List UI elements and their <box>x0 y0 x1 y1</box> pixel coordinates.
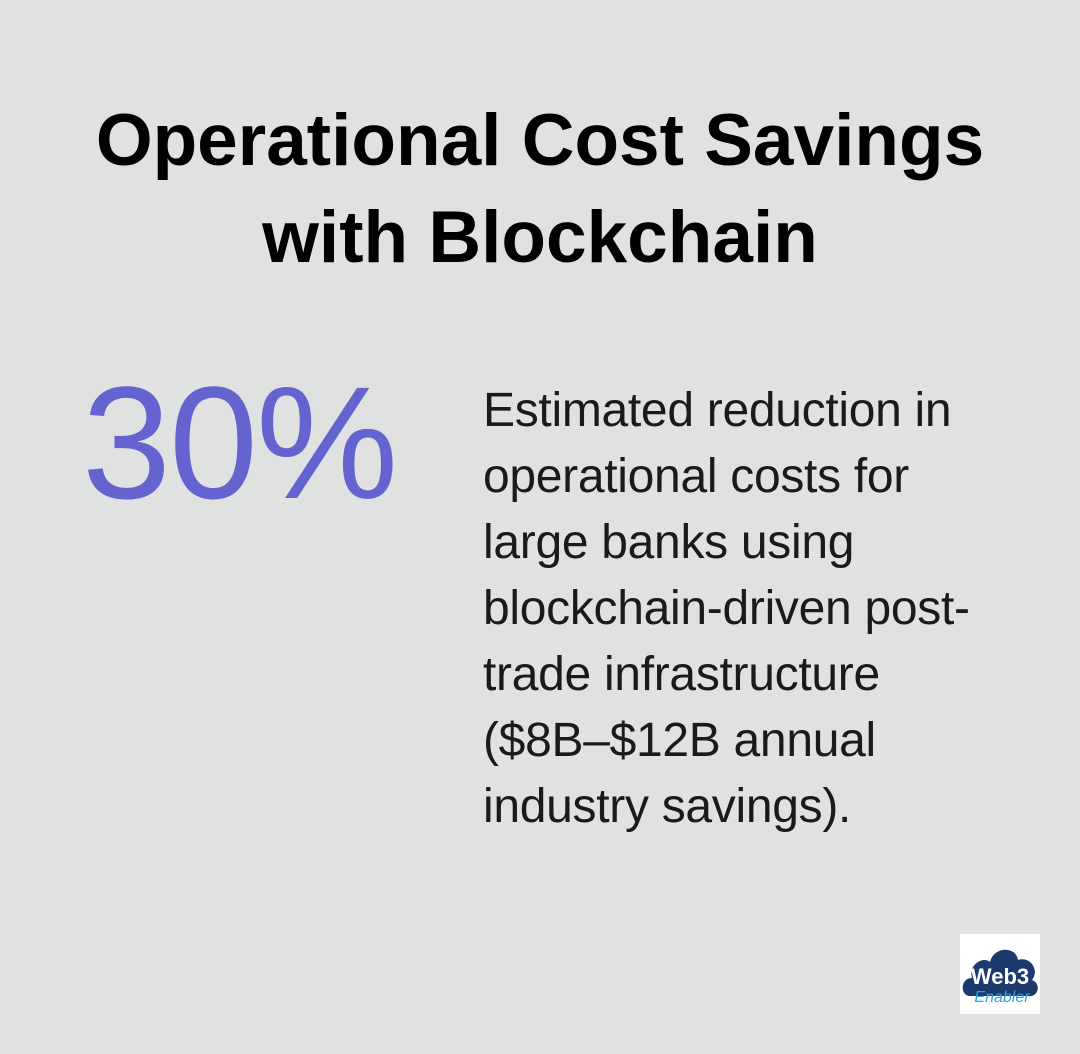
logo: Web3 Enabler: Web3 <box>971 964 1029 989</box>
title: with Blockchain <box>262 197 818 278</box>
logo: Web3 Enabler: Enabler <box>974 989 1030 1006</box>
description text: operational costs for <box>483 450 909 503</box>
description text: large banks using <box>483 516 854 569</box>
description text: industry savings). <box>483 780 851 833</box>
title <box>96 100 984 278</box>
description text: Estimated reduction in <box>483 384 951 437</box>
title: Operational Cost Savings <box>96 100 984 181</box>
big stat: 30%: 30% <box>82 353 396 532</box>
description text: blockchain-driven post- <box>483 582 970 635</box>
description text: trade infrastructure <box>483 648 880 701</box>
description text <box>483 384 970 833</box>
logo: Web3 Enabler <box>960 934 1040 1014</box>
description text: ($8B–$12B annual <box>483 714 876 767</box>
